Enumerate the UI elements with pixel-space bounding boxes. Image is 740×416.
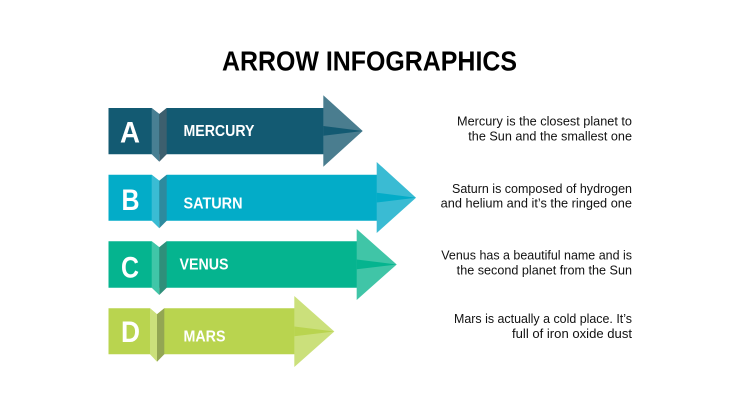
text: Mercury description: Mercury is the closest planet to xyxy=(457,114,632,128)
label Saturn: SATURN xyxy=(184,196,242,212)
text: Venus description: Venus has a beautiful name and is xyxy=(441,248,632,262)
letter D: D xyxy=(121,316,140,349)
arrow B head xyxy=(377,162,416,233)
text: Saturn description: and helium and it’s the ringed one xyxy=(441,196,632,210)
arrow C head xyxy=(357,229,397,300)
label Mercury: MERCURY xyxy=(184,123,255,140)
text: Mercury description xyxy=(457,114,632,144)
arrow A fold xyxy=(152,108,167,162)
arrow D body xyxy=(108,308,294,354)
letter B: B xyxy=(122,184,140,217)
arrow C fold xyxy=(152,241,167,295)
arrow B fold xyxy=(152,175,167,228)
label Mars: MARS xyxy=(184,328,226,346)
arrow A: Mercury xyxy=(108,95,363,167)
arrow A head xyxy=(323,95,363,167)
arrow C body xyxy=(108,241,357,288)
arrow D fold xyxy=(150,308,164,362)
text: Mars description: Mars is actually a cold place. It’s xyxy=(454,312,632,326)
label Venus: VENUS xyxy=(180,256,228,274)
arrow A body xyxy=(108,108,324,154)
arrow C: Venus xyxy=(108,229,397,300)
arrow B: Saturn xyxy=(108,162,416,233)
text: Mercury description: the Sun and the smallest one xyxy=(468,130,632,144)
letter C: C xyxy=(121,252,139,284)
text: Saturn description xyxy=(441,182,632,210)
text: Mars description: full of iron oxide dust xyxy=(512,327,633,341)
letter A: A xyxy=(120,116,140,150)
text: Saturn description: Saturn is composed of hydrogen xyxy=(452,182,632,196)
text: Venus description: the second planet from the Sun xyxy=(457,264,632,278)
arrow D head xyxy=(294,296,334,367)
text: Venus description xyxy=(441,248,632,278)
text: Mars description xyxy=(454,312,633,341)
arrow D: Mars xyxy=(108,296,334,367)
arrow B body xyxy=(108,175,377,221)
title: ARROW INFOGRAPHICS xyxy=(222,46,517,76)
